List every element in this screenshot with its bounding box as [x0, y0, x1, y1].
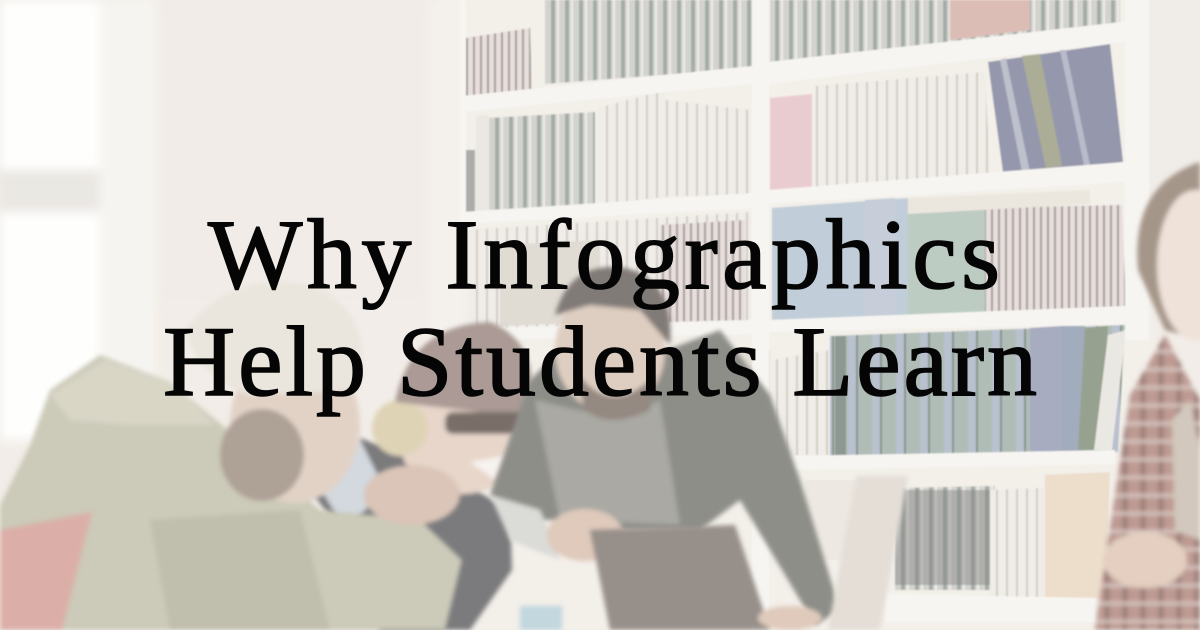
third-right shelf books — [772, 198, 908, 320]
man on left: hoodie and head — [0, 282, 462, 630]
title line 1: Why Infographics — [208, 199, 1000, 310]
man at centre-right: dark hoodie — [490, 267, 840, 625]
title line 2: Help Students Learn — [163, 306, 1037, 417]
woman at right: hair and plaid shirt — [1095, 162, 1200, 630]
third-left shelf books — [468, 212, 750, 328]
second-left shelf books — [476, 115, 488, 212]
title — [163, 199, 1037, 417]
shelf boards — [460, 0, 1149, 630]
second-right shelf books — [770, 94, 812, 192]
bookcase — [460, 0, 1200, 630]
laptops on the table — [520, 476, 908, 630]
top-right shelf books — [770, 0, 1120, 62]
fourth-right shelf books — [772, 350, 830, 455]
left lower books — [720, 350, 770, 460]
man in the middle: cap and shirt — [310, 322, 565, 630]
bottom shelf books — [805, 480, 855, 560]
top-left shelf books — [466, 28, 532, 98]
window at left — [0, 0, 465, 440]
